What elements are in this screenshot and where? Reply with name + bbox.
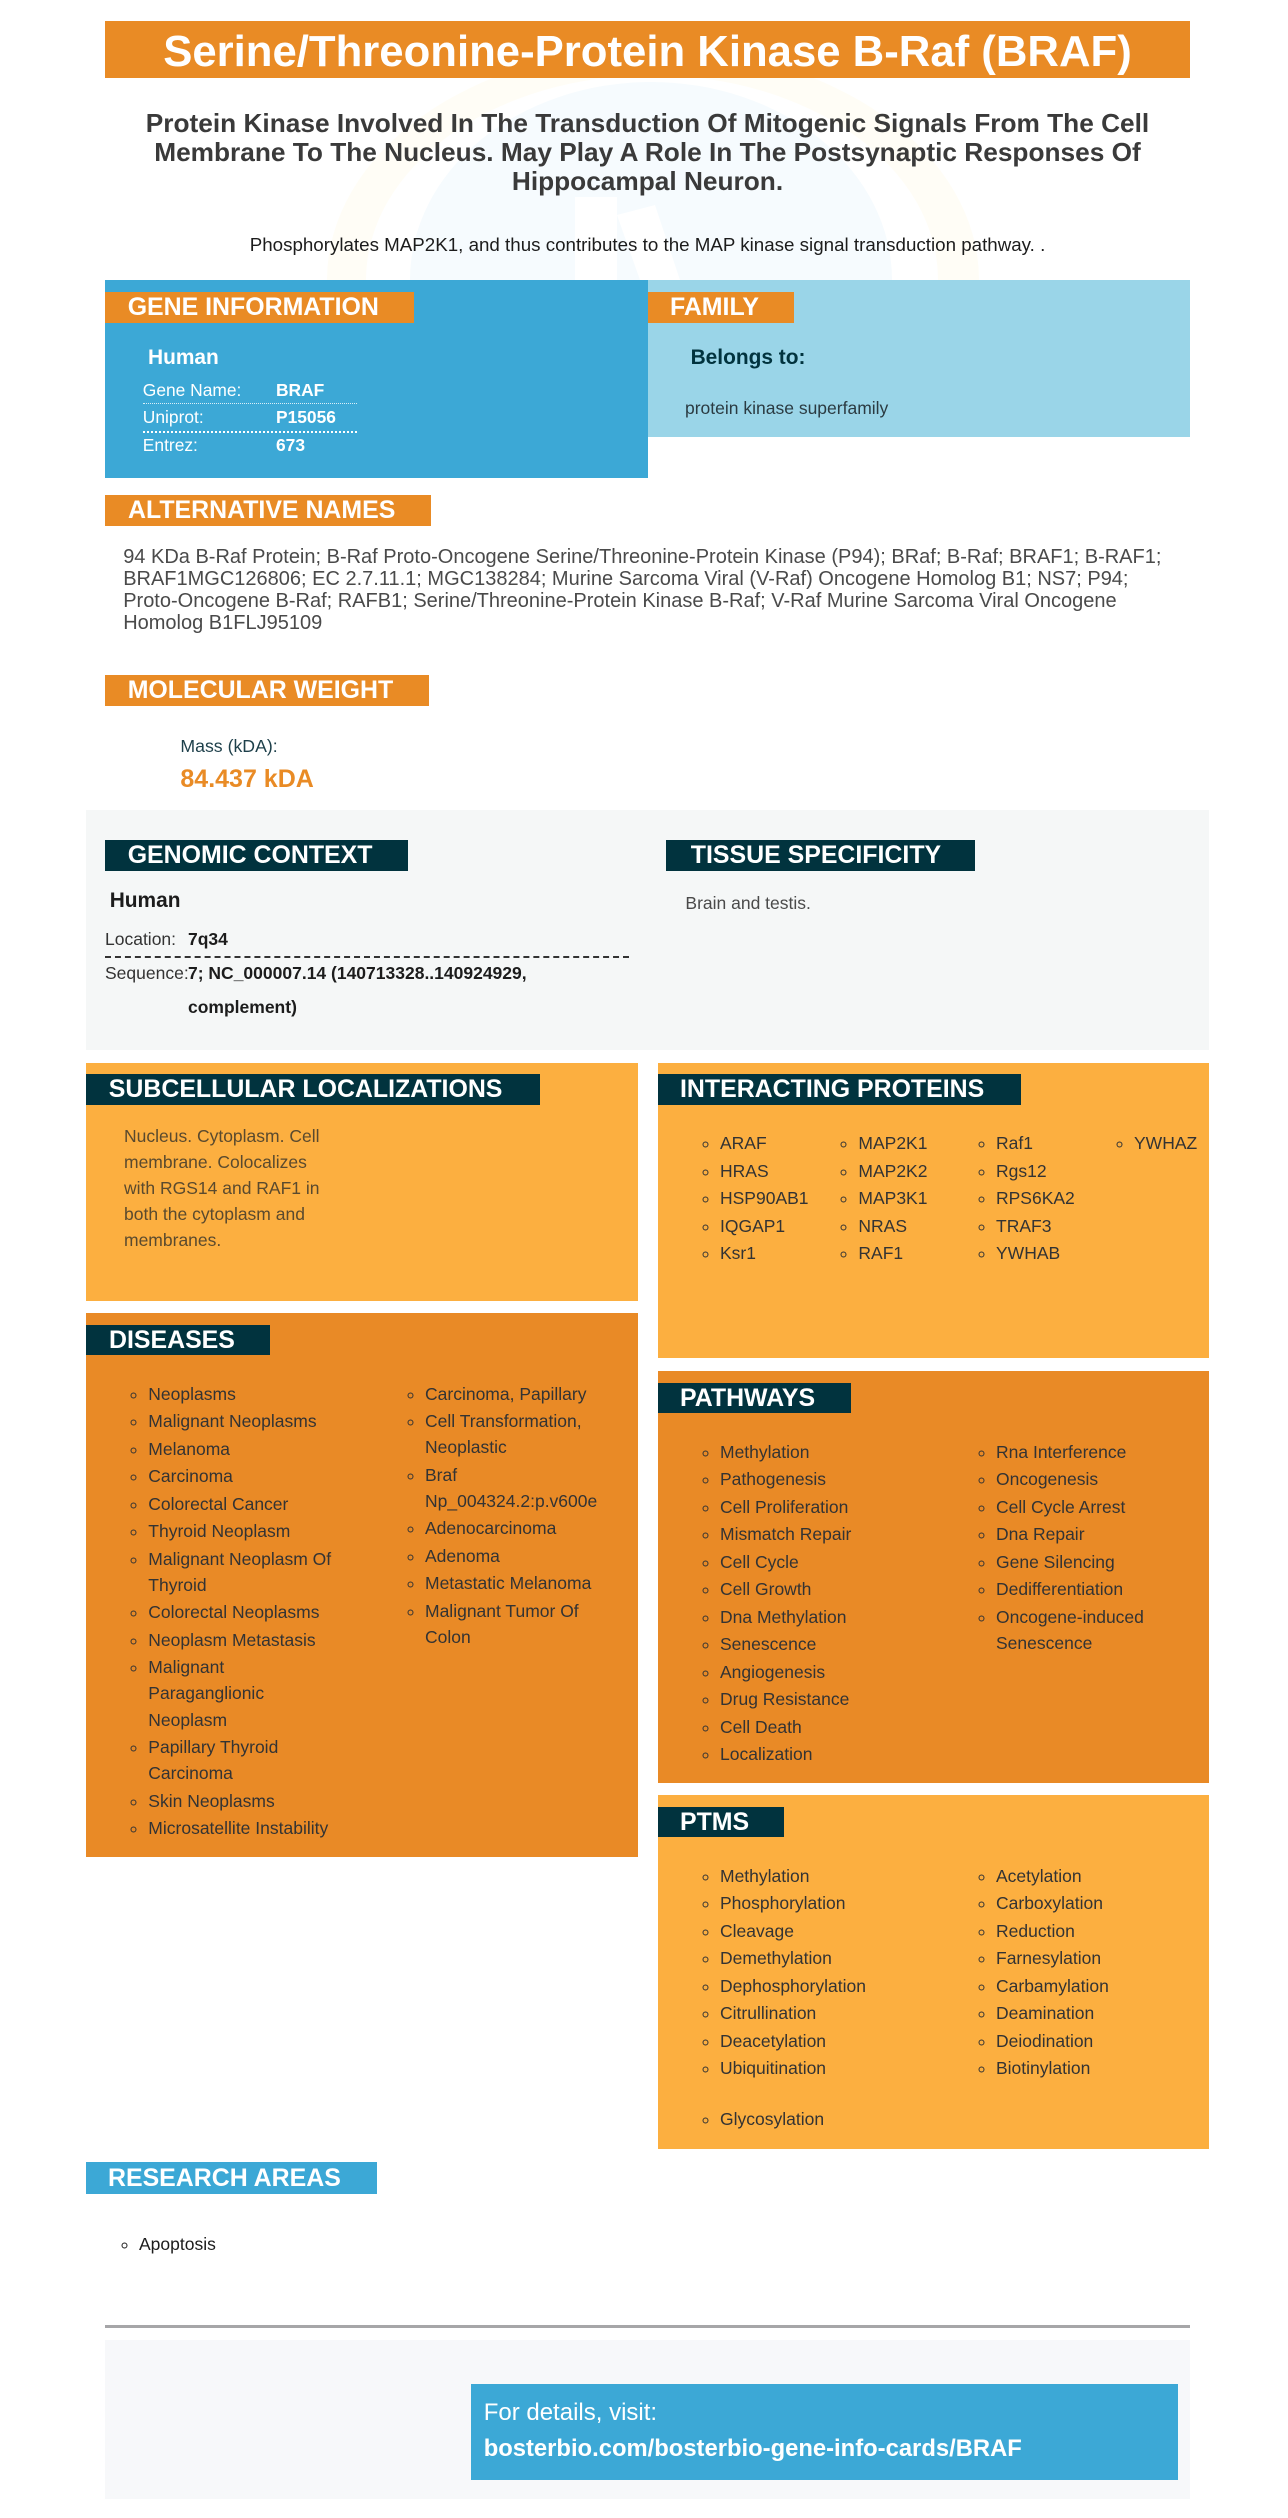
heading: subcellular localizations: SUBCELLULAR LOCALIZATIONS [109,1075,502,1103]
belongs to label: Belongs to: [691,346,805,369]
diseases list column 2 [408,1384,597,1647]
proteins list column 2: MAP3K1 [858,1188,927,1208]
location row: 7q34 [188,929,228,949]
gene name row: BRAF [276,380,324,400]
proteins list column 3: TRAF3 [996,1216,1051,1236]
section: alternative names [105,495,1161,634]
panel: diseases [86,1313,638,1857]
pathways list column 1: Cell Cycle [720,1552,799,1572]
callout url: bosterbio.com/bosterbio-gene-info-cards/BRAF [484,2435,1022,2462]
heading: ptms: PTMS [680,1808,749,1836]
panel: interacting proteins [658,1063,1209,1358]
ptms list column 2: Biotinylation [996,2058,1090,2078]
pathways list column 2: Oncogene-induced Senescence [996,1606,1144,1653]
localization text: with RGS14 and RAF1 in [124,1178,320,1198]
heading: research areas: RESEARCH AREAS [108,2164,341,2192]
proteins list column 2: NRAS [858,1216,907,1236]
entrez row: Entrez: [143,435,198,455]
diseases list column 1: Colorectal Cancer [148,1494,288,1514]
panel: footer [105,2340,1190,2499]
proteins list column 2: MAP2K2 [858,1160,927,1180]
panel: genomic context and tissue specificity [86,810,1209,1050]
pathways list column 1 [702,1442,852,1764]
ptms list column 2 [978,1866,1109,2078]
proteins list column 2 [840,1133,927,1263]
subtitle: Protein Kinase Involved In The Transduction Of Mitogenic Signals From The Cell [146,108,1149,138]
ptms list column 2: Carbamylation [996,1976,1109,1996]
ptms list column 1: Ubiquitination [720,2058,826,2078]
pathways list column 1: Angiogenesis [720,1662,825,1682]
ptms list column 1: Demethylation [720,1948,832,1968]
diseases list column 1: Neoplasm Metastasis [148,1630,316,1650]
heading: family [648,292,794,323]
pathways list column 2: Dna Repair [996,1524,1085,1544]
diseases list column 1: Malignant Paraganglionic Neoplasm [148,1657,264,1730]
proteins list column 3 [978,1133,1075,1263]
diseases list column 2: Metastatic Melanoma [425,1573,591,1593]
callout: details link [471,2384,1178,2480]
pathways list column 1: Cell Death [720,1716,802,1736]
heading: molecular weight: MOLECULAR WEIGHT [128,676,393,704]
section: molecular weight [105,675,429,793]
diseases list column 1: Colorectal Neoplasms [148,1602,319,1622]
uniprot row [143,404,357,433]
gene name row [143,377,357,404]
diseases list column 1: Microsatellite Instability [148,1818,328,1838]
diseases list column 1: Malignant Neoplasm Of Thyroid [148,1548,331,1595]
location row [105,926,629,958]
localization text: both the cytoplasm and [124,1204,305,1224]
ptms list column 1 [702,1866,866,2129]
entrez row [143,435,305,455]
function summary: Phosphorylates MAP2K1, and thus contributes to the MAP kinase signal transduction pathway. . [250,234,1045,255]
panel: family [648,280,1190,437]
localization text: membranes. [124,1230,221,1250]
heading: family: FAMILY [670,293,759,321]
watermark logo [327,78,979,280]
ptms list column 2: Reduction [996,1920,1075,1940]
ptms list column 1: Dephosphorylation [720,1976,866,1996]
heading: diseases [86,1325,270,1355]
ptms list column 2: Deiodination [996,2030,1093,2050]
subtitle: Hippocampal Neuron. [512,166,783,196]
heading: pathways [658,1382,851,1412]
subtitle: Membrane To The Nucleus. May Play A Role In The Postsynaptic Responses Of [154,137,1141,167]
family value: protein kinase superfamily [685,398,888,418]
panel: pathways [658,1371,1209,1782]
pathways list column 2: Rna Interference [996,1442,1126,1462]
alternative names text: BRAF1MGC126806; EC 2.7.11.1; MGC138284; Murine Sarcoma Viral (V-Raf) Oncogene Homolog B1; NS7; P94; [123,568,1128,590]
proteins list column 1: HRAS [720,1160,769,1180]
heading: ptms [658,1807,784,1837]
ptms list column 2: Carboxylation [996,1893,1103,1913]
sequence row [105,963,527,1017]
diseases list column 1 [130,1384,332,1838]
species label: Human [110,889,180,912]
panel: gene information [105,280,648,478]
sequence row: complement) [188,997,297,1017]
species label: Human [148,346,219,369]
heading: gene information: GENE INFORMATION [128,293,379,321]
pathways list column 2: Oncogenesis [996,1469,1098,1489]
diseases list column 2: Malignant Tumor Of Colon [425,1601,579,1647]
pathways list column 1: Cell Growth [720,1579,811,1599]
proteins list column 2: RAF1 [858,1243,903,1263]
proteins list column 3: Rgs12 [996,1160,1047,1180]
proteins list column 1: HSP90AB1 [720,1188,809,1208]
location row: Location: [105,929,176,949]
ptms list column 1: Deacetylation [720,2030,826,2050]
callout label: For details, visit: [484,2399,657,2426]
ptms list column 1: Glycosylation [720,2109,824,2129]
diseases list column 1: Carcinoma [148,1466,233,1486]
proteins list column 1: Ksr1 [720,1243,756,1263]
pathways list column 1: Localization [720,1744,812,1764]
sequence row: Sequence: [105,963,189,983]
localization text: Nucleus. Cytoplasm. Cell [124,1126,319,1146]
diseases list column 1: Thyroid Neoplasm [148,1521,290,1541]
alternative names text: Homolog B1FLJ95109 [123,612,322,634]
proteins list column 3: YWHAB [996,1243,1060,1263]
heading: interacting proteins: INTERACTING PROTEINS [680,1075,984,1103]
diseases list column 2: Carcinoma, Papillary [425,1384,586,1404]
diseases list column 2: Cell Transformation, Neoplastic [425,1411,582,1457]
ptms list column 2: Acetylation [996,1866,1082,1886]
uniprot row: Uniprot: [143,407,204,427]
heading: alternative names: ALTERNATIVE NAMES [128,496,395,524]
diseases list column 2: Adenoma [425,1546,500,1566]
pathways list column 1: Drug Resistance [720,1689,849,1709]
panel: ptms [658,1795,1209,2149]
diseases list column 1: Skin Neoplasms [148,1791,275,1811]
heading: pathways: PATHWAYS [680,1384,815,1412]
research areas list: Apoptosis [139,2234,216,2254]
pathways list column 2 [978,1442,1144,1653]
tissue text: Brain and testis. [685,893,811,913]
pathways list column 1: Dna Methylation [720,1606,846,1626]
pathways list column 2: Cell Cycle Arrest [996,1496,1125,1516]
ptms list column 1: Phosphorylation [720,1893,846,1913]
proteins list column 3: RPS6KA2 [996,1188,1075,1208]
entrez row: 673 [276,435,305,455]
alternative names text: Proto-Oncogene B-Raf; RAFB1; Serine/Threonine-Protein Kinase B-Raf; V-Raf Murine Sarcoma Viral Oncogene [123,590,1117,612]
panel: subcellular localizations [86,1063,638,1300]
mass label: Mass (kDA): [180,736,278,756]
proteins list column 1: IQGAP1 [720,1216,785,1236]
diseases list column 1: Melanoma [148,1438,230,1458]
proteins list column 2: MAP2K1 [858,1133,927,1153]
title: Serine/Threonine-Protein Kinase B-Raf (BRAF) [163,27,1132,76]
pathways list column 1: Pathogenesis [720,1469,826,1489]
proteins list column 1: ARAF [720,1133,767,1153]
heading: diseases: DISEASES [109,1326,235,1354]
mass value: 84.437 kDA [180,765,314,793]
alternative names text [123,546,1161,634]
diseases list column 1: Neoplasms [148,1384,236,1404]
uniprot row: P15056 [276,407,336,427]
pathways list column 1: Mismatch Repair [720,1524,851,1544]
localization text: membrane. Colocalizes [124,1152,307,1172]
ptms list column 2: Deamination [996,2003,1094,2023]
proteins list column 4: YWHAZ [1134,1133,1197,1153]
proteins list column 1 [702,1133,809,1263]
heading: genomic context: GENOMIC CONTEXT [128,841,372,869]
ptms list column 1: Methylation [720,1866,810,1886]
diseases list column 1: Papillary Thyroid Carcinoma [148,1737,278,1783]
diseases list column 2: Braf Np_004324.2:p.v600e [425,1465,597,1511]
pathways list column 2: Dedifferentiation [996,1579,1123,1599]
localization text [124,1126,320,1250]
subtitle [146,108,1149,196]
diseases list column 2: Adenocarcinoma [425,1518,556,1538]
section: research areas [86,2162,377,2254]
diseases list column 1: Malignant Neoplasms [148,1411,317,1431]
pathways list column 1: Cell Proliferation [720,1496,848,1516]
ptms list column 1: Citrullination [720,2003,816,2023]
alternative names text: 94 KDa B-Raf Protein; B-Raf Proto-Oncogene Serine/Threonine-Protein Kinase (P94); BRaf; B-Raf; BRAF1; B-RAF1; [123,546,1161,568]
proteins list column 3: Raf1 [996,1133,1033,1153]
gene name row: Gene Name: [143,380,241,400]
pathways list column 2: Gene Silencing [996,1552,1115,1572]
heading: tissue specificity: TISSUE SPECIFICITY [691,841,941,869]
ptms list column 2: Farnesylation [996,1948,1101,1968]
pathways list column 1: Senescence [720,1634,816,1654]
ptms list column 1: Cleavage [720,1920,794,1940]
sequence row: 7; NC_000007.14 (140713328..140924929, [188,963,527,983]
pathways list column 1: Methylation [720,1442,810,1462]
